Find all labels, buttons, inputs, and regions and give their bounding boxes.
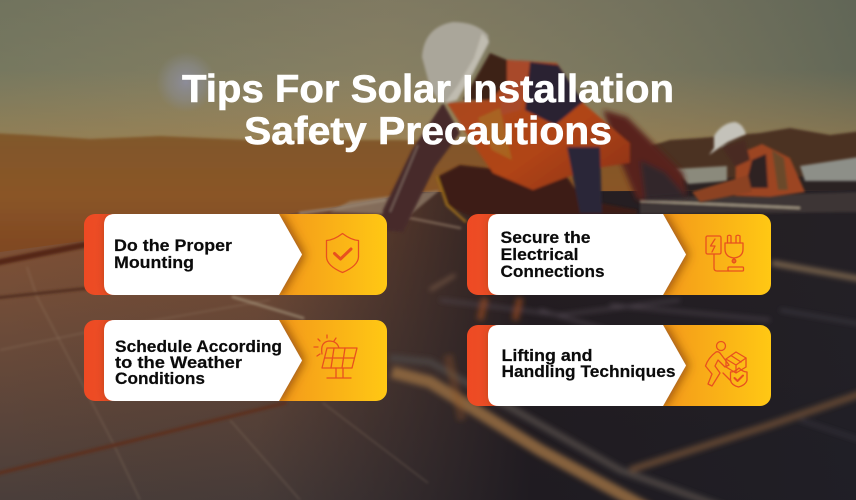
worker: far right with helmet (692, 122, 805, 202)
panel frame beams, left side (0, 200, 460, 474)
card text: Connections (500, 262, 604, 281)
card base (84, 320, 387, 401)
card text (115, 337, 282, 388)
helmet (422, 22, 489, 103)
worker: foreground kneeling (381, 22, 637, 232)
worker: background middle (603, 110, 687, 200)
card text: Mounting (114, 253, 194, 272)
right arm (567, 147, 602, 213)
white label (488, 214, 686, 295)
card base (467, 214, 771, 295)
vest (447, 60, 630, 190)
card base (84, 214, 387, 295)
icon: worker lifting box with shield (706, 342, 747, 387)
card text: Lifting and (502, 346, 592, 365)
card text (502, 346, 676, 381)
card text: Handling Techniques (502, 362, 676, 381)
white label (488, 325, 686, 406)
icon: shield check (326, 234, 358, 272)
title (182, 68, 674, 153)
rear leg (437, 165, 637, 216)
card text: Electrical (500, 245, 578, 264)
card text: to the Weather (115, 353, 242, 372)
card text: Do the Proper (114, 236, 232, 255)
card: Schedule According to the Weather Conditions (84, 320, 387, 401)
tree line (0, 128, 856, 270)
card: Secure the Electrical Connections (467, 214, 771, 295)
sun glow (156, 52, 216, 112)
solar roof surface (0, 190, 856, 500)
helmet (709, 122, 746, 155)
card text (500, 228, 604, 281)
panel grid lines, left side (0, 267, 428, 500)
panel frame beams, right side (390, 263, 856, 500)
icon: sun and solar panel (314, 335, 357, 378)
vest (735, 144, 805, 197)
card text (114, 236, 232, 272)
card text: Conditions (115, 369, 205, 388)
arms (692, 175, 752, 202)
roof panels under the workers (330, 156, 856, 215)
white label (104, 320, 302, 401)
card: Do the Proper Mounting (84, 214, 387, 295)
sky (0, 0, 856, 170)
face (722, 140, 750, 167)
title: Safety Precautions (244, 110, 612, 153)
neck and face (463, 53, 507, 100)
white label (104, 214, 302, 295)
card text: Schedule According (115, 337, 282, 356)
card base (467, 325, 771, 406)
icon: power box and plug (706, 235, 744, 271)
left arm (381, 103, 460, 232)
title: Tips For Solar Installation (182, 68, 674, 111)
card text: Secure the (500, 228, 590, 247)
card: Lifting and Handling Techniques (467, 325, 771, 406)
